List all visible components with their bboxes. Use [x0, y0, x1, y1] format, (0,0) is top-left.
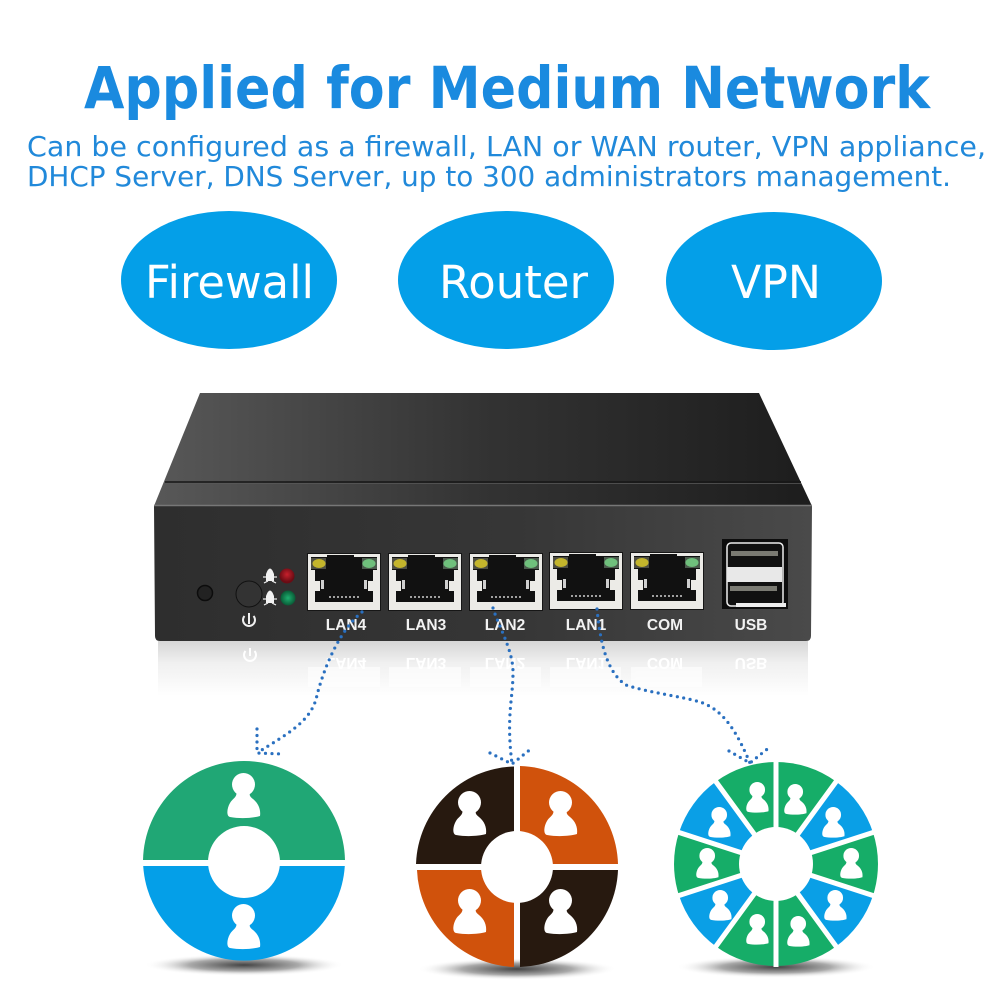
badge: Router: Router	[439, 256, 588, 309]
port labels: COM	[647, 617, 683, 634]
arrow: LAN1 to 10 users	[597, 609, 771, 763]
port labels: USB	[735, 617, 767, 634]
user circle: 2 users	[143, 761, 345, 961]
badge: Router	[398, 211, 614, 349]
port labels: LAN1	[566, 617, 607, 634]
arrow: LAN2 to 4 users	[490, 608, 532, 764]
reset button	[198, 586, 212, 600]
LED red	[280, 568, 294, 584]
device reflection	[158, 641, 808, 696]
device reflection: LAN4	[326, 654, 367, 671]
LED green	[280, 590, 296, 606]
port LAN2	[469, 553, 543, 611]
badge: VPN: VPN	[731, 256, 821, 309]
port COM	[630, 552, 704, 610]
power icon	[243, 613, 255, 626]
LED icons	[263, 568, 277, 605]
user circle: 10 users	[674, 760, 878, 967]
port LAN1	[549, 552, 623, 610]
port labels: LAN4	[326, 617, 367, 634]
device reflection: COM	[647, 654, 683, 671]
title: Applied for Medium Network	[84, 54, 931, 122]
port LAN4	[307, 553, 381, 611]
badge: Firewall: Firewall	[145, 256, 314, 309]
port labels	[326, 617, 767, 634]
device front panel	[154, 506, 812, 641]
subtitle text: Can be configured as a firewall, LAN or WAN router, VPN appliance,	[27, 130, 986, 163]
shadow: circle 1	[144, 954, 344, 976]
device reflection: LAN2	[485, 654, 525, 671]
port labels: LAN2	[485, 617, 525, 634]
port labels: LAN3	[406, 617, 447, 634]
port LAN3	[388, 553, 462, 611]
badge: Firewall	[121, 211, 337, 349]
user circle: 4 users	[416, 766, 618, 967]
shadow: circle 3	[676, 956, 876, 978]
power button	[236, 581, 262, 607]
USB ports	[722, 539, 788, 609]
device reflection: LAN1	[566, 654, 607, 671]
subtitle text	[27, 130, 986, 193]
device reflection: LAN3	[406, 654, 447, 671]
badge: VPN	[666, 212, 882, 350]
device reflection: USB	[735, 654, 767, 671]
device top panel	[154, 393, 812, 506]
subtitle text: DHCP Server, DNS Server, up to 300 administrators management.	[27, 160, 951, 193]
arrow: LAN4 to 2 users	[257, 612, 362, 754]
firewall device	[154, 393, 812, 641]
shadow: circle 2	[417, 958, 617, 980]
